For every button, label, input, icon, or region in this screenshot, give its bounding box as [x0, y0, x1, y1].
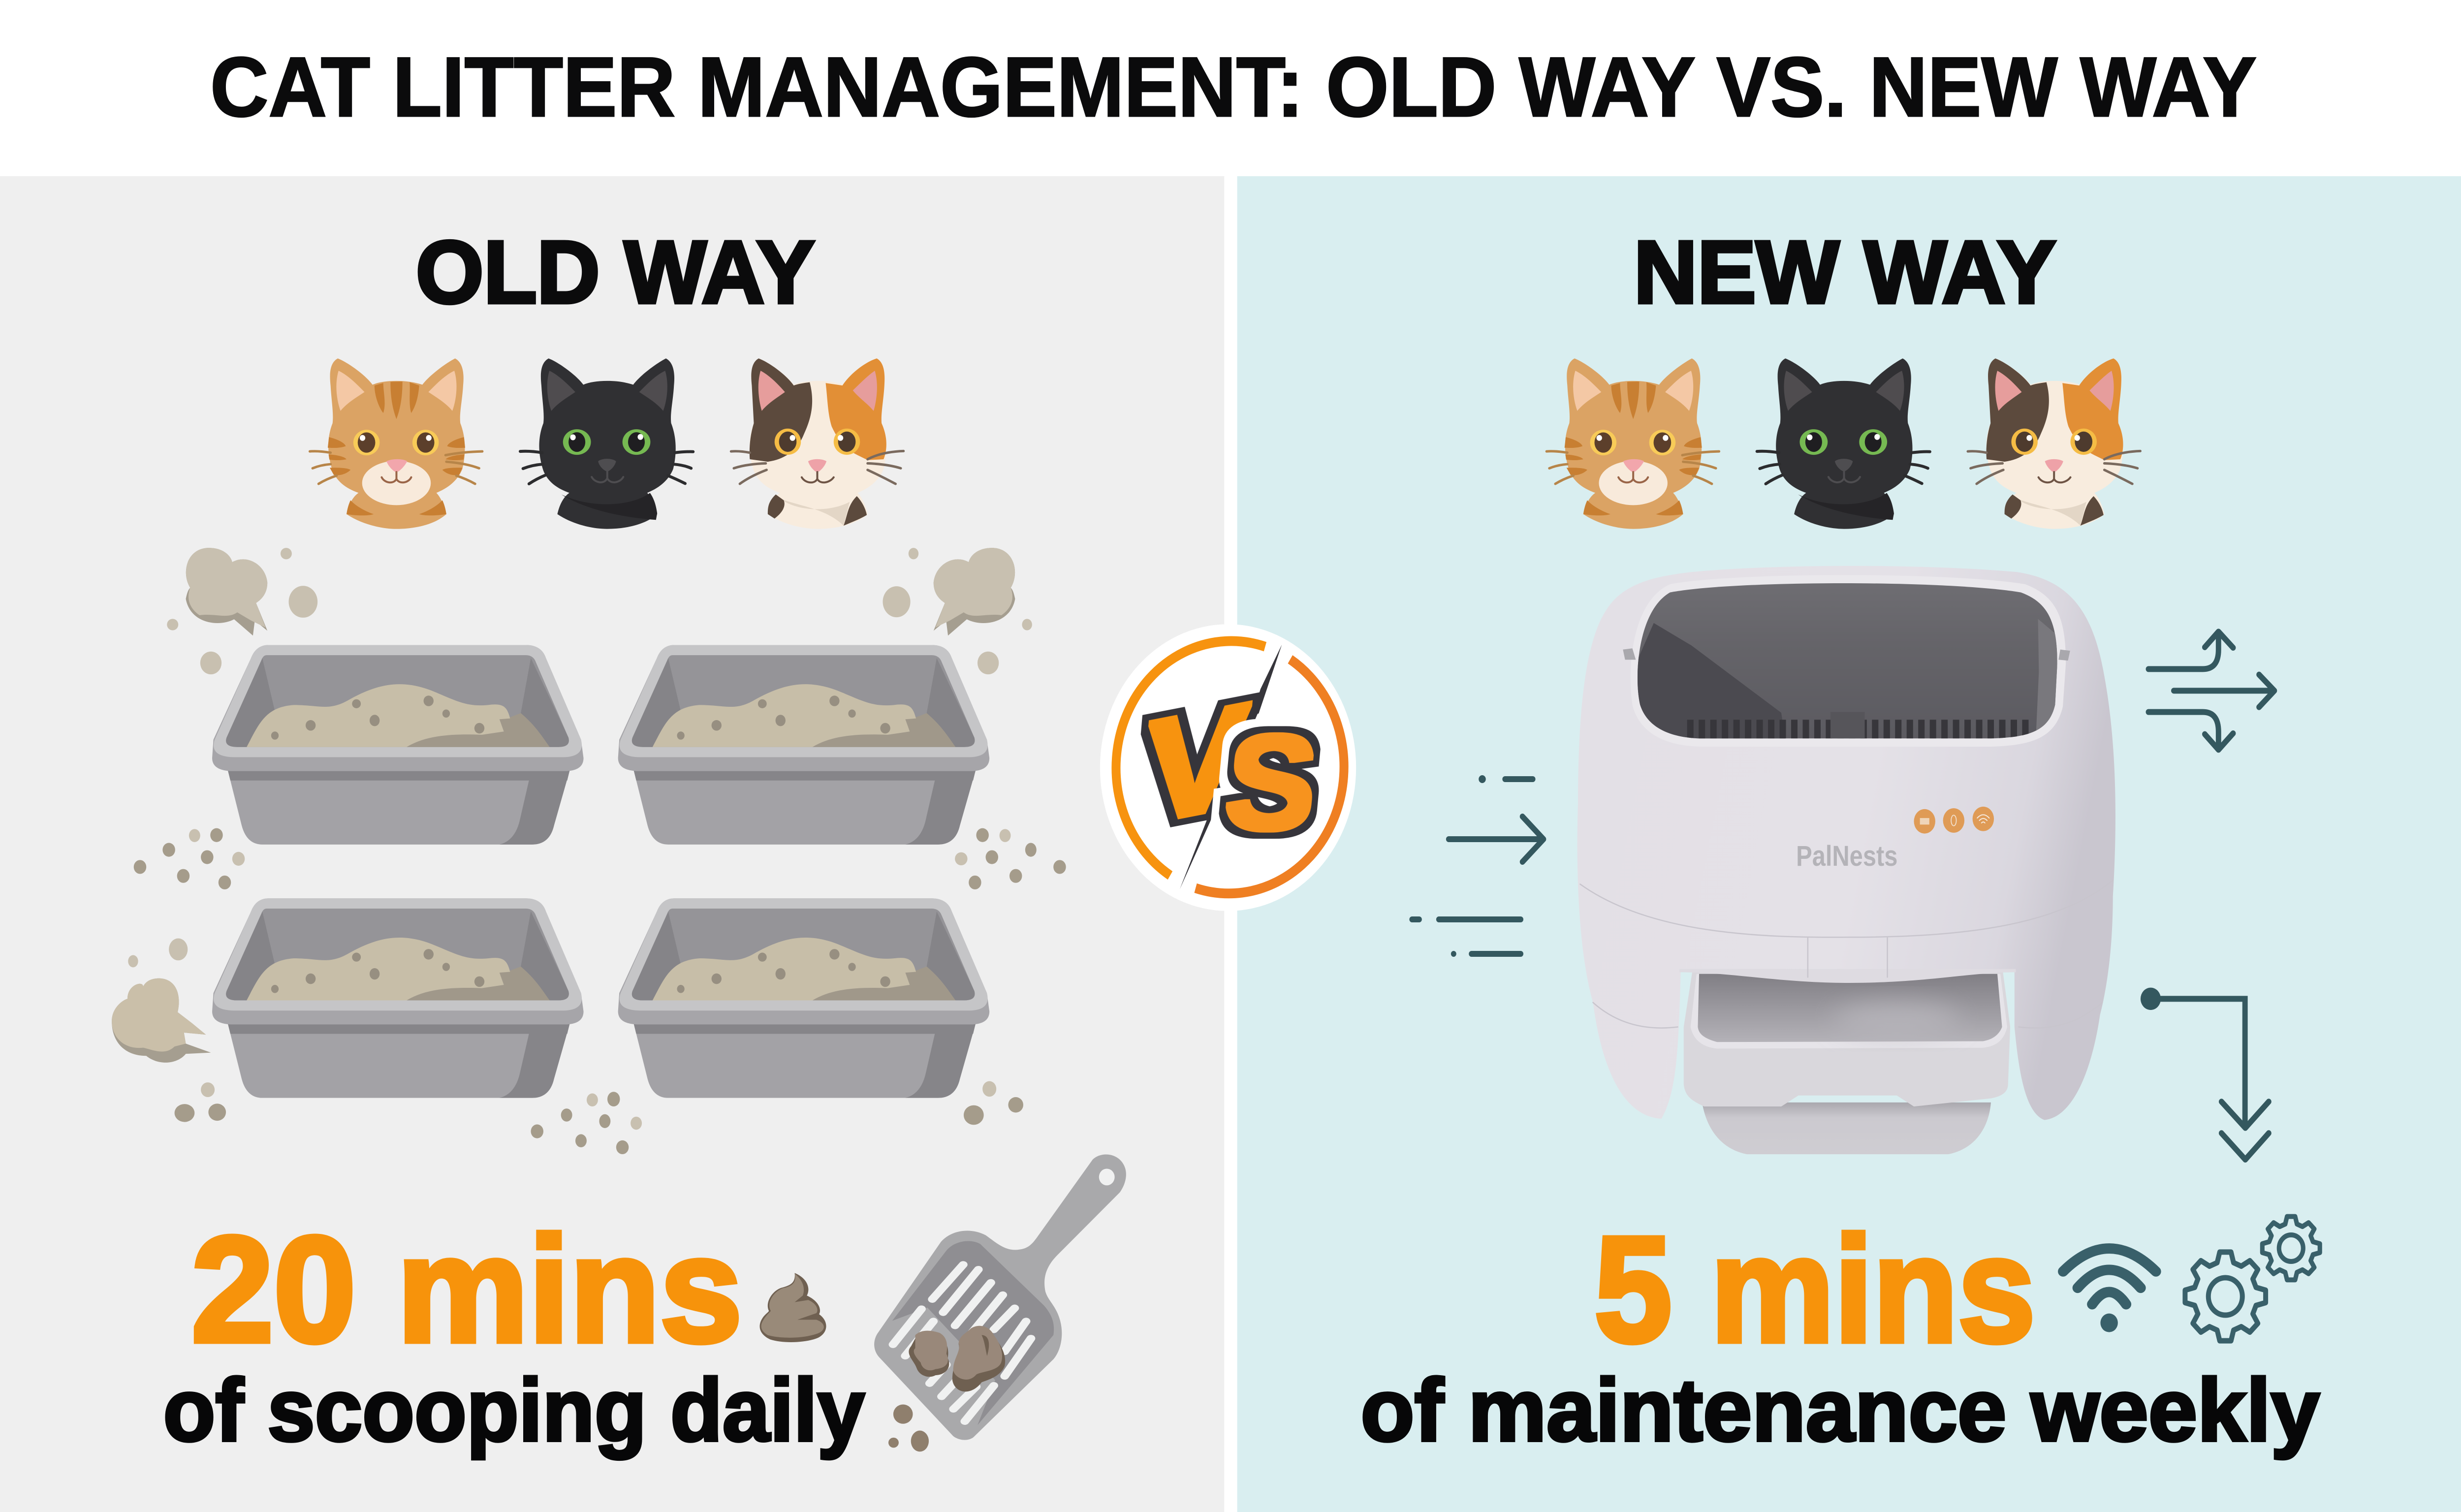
- status icons: [1914, 807, 1994, 834]
- arrow: waste to drawer: [2141, 988, 2269, 1160]
- icon: wifi: [2063, 1249, 2156, 1332]
- device body: [1578, 566, 2115, 1120]
- body underside: [1679, 969, 2016, 983]
- cat: orange tabby: [1546, 358, 1719, 529]
- side clips: [1623, 648, 2070, 661]
- stat: 5 mins: 5 mins: [1594, 1205, 2035, 1373]
- body seams: [1580, 880, 2113, 1028]
- brand label: PalNests: [1796, 840, 1897, 872]
- automatic litter box device: [1578, 566, 2115, 1154]
- icon: litter scoop: [874, 1155, 1126, 1451]
- cat: calico: [731, 358, 904, 529]
- vs badge: [1100, 624, 1356, 911]
- caption: of maintenance weekly: of maintenance weekly: [1360, 1361, 2320, 1460]
- drawer tray: [1684, 972, 2010, 1106]
- panel: old way: [0, 176, 1224, 1512]
- cat: black: [1757, 358, 1930, 529]
- vs badge: V: [1139, 671, 1254, 854]
- stat: 20 mins: 20 mins: [191, 1205, 742, 1373]
- cat: black: [520, 358, 693, 529]
- odor clouds and litter scatter: [112, 548, 1066, 1154]
- title: CAT LITTER MANAGEMENT: OLD WAY VS. NEW WAY: [210, 39, 2257, 134]
- arrow: outgoing air: [2148, 631, 2274, 750]
- heading: new way: NEW WAY: [1634, 223, 2056, 322]
- icon: gears: [2185, 1217, 2320, 1341]
- cat: orange tabby: [310, 358, 482, 529]
- waste drawer bin: [1702, 1102, 1991, 1154]
- opening rim: [1631, 575, 2066, 747]
- heading: old way: OLD WAY: [416, 223, 815, 322]
- panel: new way: [1237, 176, 2461, 1512]
- vs badge: S: [1219, 708, 1324, 858]
- icon: poop: [760, 1273, 826, 1342]
- litter boxes: [212, 645, 989, 1098]
- caption: of scooping daily: of scooping daily: [163, 1361, 865, 1460]
- cat: calico: [1968, 358, 2140, 529]
- arrow: incoming air: [1412, 775, 1544, 957]
- opening interior: [1632, 578, 2064, 741]
